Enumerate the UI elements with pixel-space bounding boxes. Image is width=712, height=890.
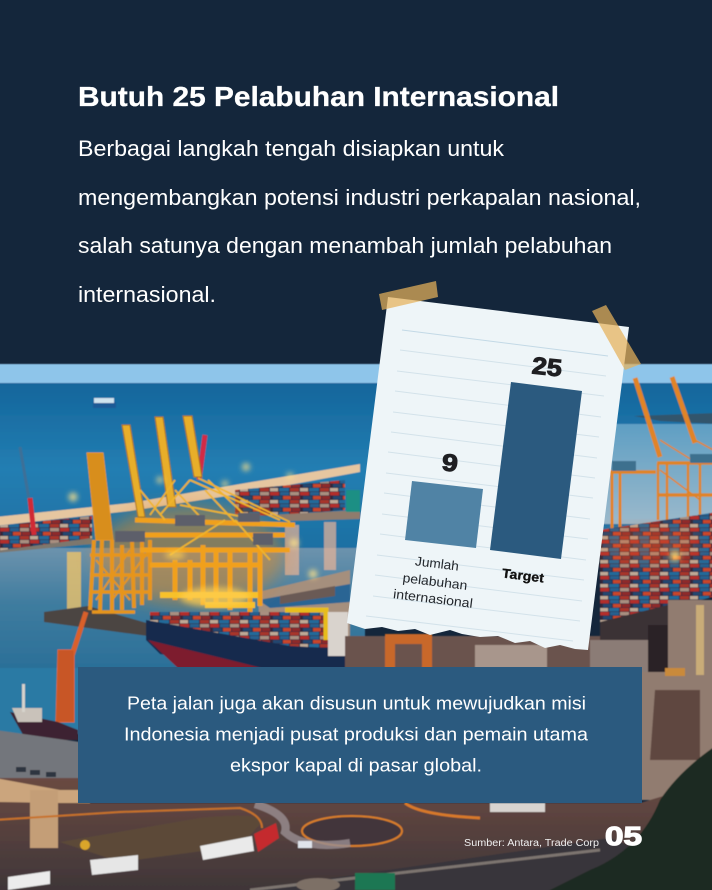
- gantry crane booms: [122, 416, 202, 517]
- green wagon: [355, 873, 395, 890]
- intro paragraph: salah satunya dengan menambah jumlah pelabuhan: [78, 233, 612, 258]
- ship hull red: [148, 640, 270, 670]
- intro paragraph: mengembangkan potensi industri perkapalan nasional,: [78, 185, 641, 210]
- gantry crane two body: [135, 478, 295, 612]
- bar: target: [490, 382, 582, 559]
- small van: [298, 841, 312, 848]
- crane glow: [165, 551, 250, 607]
- moored ship: [10, 712, 78, 740]
- left sea strip: [0, 668, 80, 734]
- tank: [296, 878, 340, 890]
- page number: 05: [605, 821, 642, 851]
- yard containers: [258, 584, 350, 608]
- warm light on yard: [600, 529, 700, 561]
- quay centre containers: [235, 480, 345, 516]
- green building: [346, 490, 360, 512]
- right container yard: [600, 512, 712, 625]
- tape left: [379, 281, 438, 310]
- yard foreground dark: [600, 605, 668, 640]
- roundabout: [302, 816, 402, 846]
- loading dock: [44, 606, 150, 636]
- label: jumlah pelabuhan internasional: Jumlah: [414, 553, 460, 574]
- intro paragraph: internasional.: [78, 282, 216, 307]
- port photograph: [0, 364, 712, 890]
- ship hull: [146, 620, 365, 670]
- parked cars: [16, 767, 56, 777]
- intro paragraph: [78, 136, 641, 307]
- dark header background: [0, 0, 712, 364]
- bar: jumlah pelabuhan internasional: [405, 481, 483, 548]
- curve barrier: [405, 803, 480, 818]
- earth mound: [60, 816, 262, 862]
- refinery glow: [665, 668, 685, 676]
- label: target: Target: [501, 566, 546, 586]
- concrete wall: [0, 730, 80, 782]
- ship crane: [285, 610, 326, 640]
- quay right edge: [270, 510, 360, 521]
- orange haze behind cranes: [95, 505, 285, 605]
- title: Butuh 25 Pelabuhan Internasional: [78, 81, 559, 112]
- light strip: [250, 850, 600, 890]
- ship containers: [150, 612, 340, 660]
- flyover pillar: [30, 790, 58, 848]
- mast: [22, 684, 25, 712]
- dark gap: [648, 625, 670, 675]
- label: jumlah pelabuhan internasional: [392, 553, 474, 611]
- right crane cabins: [612, 454, 712, 471]
- ruled lines: [366, 330, 608, 641]
- road markings: [0, 808, 262, 828]
- source note: Sumber: Antara, Trade Corp: [464, 838, 599, 849]
- hill: [540, 745, 712, 890]
- truck three: [8, 871, 50, 890]
- right harbour water: [600, 424, 712, 524]
- building windows: [696, 605, 704, 675]
- ship bridge: [328, 612, 348, 656]
- crane cabins: [115, 513, 273, 545]
- label: jumlah pelabuhan internasional: pelabuhan: [402, 570, 468, 593]
- distant ship: [93, 398, 116, 408]
- trailers behind box: [490, 803, 545, 812]
- sky: [0, 364, 712, 384]
- paper sheet: [347, 297, 629, 650]
- far breakwater right: [634, 413, 712, 424]
- yellow sign: [80, 840, 90, 850]
- silos right: [590, 640, 648, 672]
- light trail: [255, 804, 350, 845]
- tape right: [592, 305, 641, 370]
- value 25: 25: [531, 353, 563, 382]
- refinery under paper: [345, 636, 600, 672]
- truck two: [90, 855, 138, 875]
- callout text: ekspor kapal di pasar global.: [230, 756, 482, 776]
- yard ground front: [258, 570, 350, 640]
- orange structure under paper: [385, 634, 432, 672]
- moored ship cabin: [12, 708, 42, 722]
- breakwater pier: [0, 464, 360, 526]
- reflections: [67, 522, 336, 612]
- harbour water: [0, 548, 365, 672]
- gantry crane one: [87, 453, 150, 612]
- ground: [0, 778, 712, 890]
- intro paragraph: Berbagai langkah tengah disiapkan untuk: [78, 136, 505, 161]
- lamp lights: [69, 464, 317, 578]
- right crane: [610, 377, 712, 530]
- label: jumlah pelabuhan internasional: internasional: [392, 586, 474, 611]
- callout text: [124, 694, 589, 776]
- callout text: Indonesia menjadi pusat produksi dan pemain utama: [124, 724, 589, 744]
- flyover: [0, 778, 90, 803]
- red crane left: [20, 447, 34, 535]
- yard dark containers: [280, 586, 335, 604]
- truck one: [200, 823, 279, 860]
- right lamp: [670, 551, 680, 561]
- sea: [0, 383, 712, 555]
- refinery tower: [650, 690, 700, 760]
- quay left containers: [0, 516, 92, 553]
- tan block under paper: [475, 645, 547, 672]
- callout text: Peta jalan juga akan disusun untuk mewujudkan misi: [127, 694, 586, 714]
- orange crane foreground: [56, 612, 86, 722]
- torn note paper with chart: [347, 281, 641, 650]
- quay strip: [0, 538, 92, 553]
- callout box: [78, 667, 642, 803]
- value 9: 9: [440, 449, 459, 478]
- red mast: [199, 435, 205, 480]
- rail tracks: [215, 838, 640, 890]
- industrial building right: [640, 600, 712, 800]
